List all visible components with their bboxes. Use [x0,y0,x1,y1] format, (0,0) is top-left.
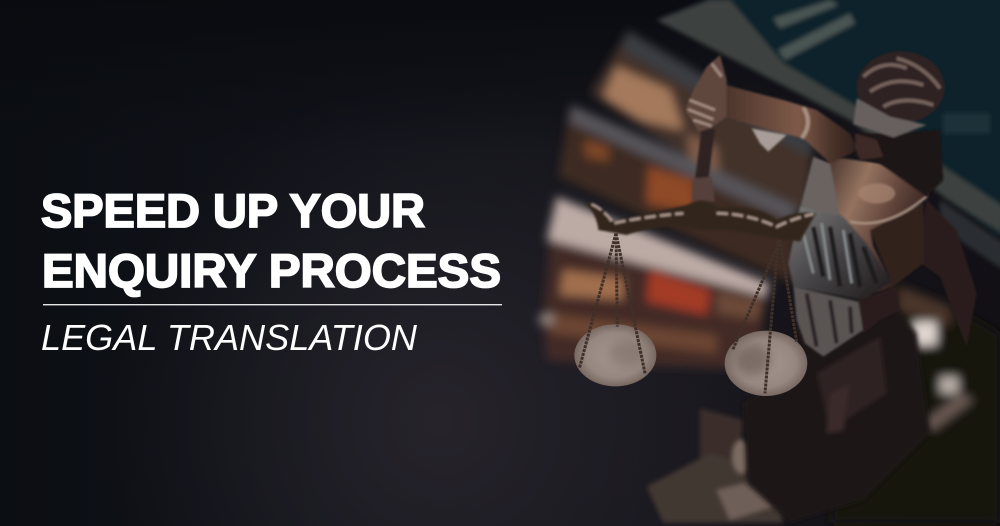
scale beam [585,201,816,242]
right scale pan with chains [725,240,807,396]
divider rule [43,304,502,305]
teal law book, top right [657,0,1000,270]
left scale pan with chains [574,233,656,386]
subtitle: LEGAL TRANSLATION [41,317,418,358]
headline line 1: SPEED UP YOUR [41,185,425,238]
stacked brown law books, blurred [538,30,813,370]
photo: statue of Lady Justice with books [538,0,1000,523]
statue raised arm [725,85,858,163]
headline [41,185,501,298]
statue lower robe [743,300,930,523]
headline line 2: ENQUIRY PROCESS [42,245,501,298]
statue torso and dress [788,157,977,357]
lower right dark furnishings [830,280,1000,523]
statue head [853,51,945,197]
statue base [647,408,783,523]
sword and hand [685,55,727,202]
